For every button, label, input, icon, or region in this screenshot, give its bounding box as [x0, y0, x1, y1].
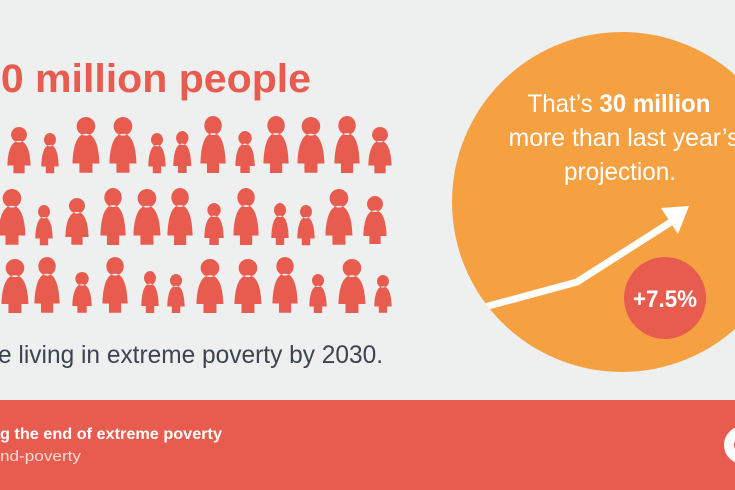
- arrow: [470, 206, 689, 311]
- row 3: [1, 257, 392, 313]
- subtitle: e living in extreme poverty by 2030.: [0, 341, 383, 369]
- percentage badge: +7.5%: [633, 286, 697, 313]
- callout text: That’s 30 million: [528, 90, 710, 118]
- percentage badge: [624, 257, 706, 339]
- row 2: [0, 188, 387, 245]
- orange circle callout: [452, 32, 735, 372]
- callout text: [508, 90, 735, 186]
- footer text: g the end of extreme poverty: [0, 426, 222, 443]
- callout text: projection.: [564, 158, 676, 186]
- people icons: [0, 116, 392, 313]
- row 1: [7, 116, 392, 173]
- callout text: more than last year’s: [508, 124, 735, 152]
- logo: [729, 431, 735, 459]
- footer: [0, 400, 735, 490]
- footer: nd-poverty: [0, 448, 82, 465]
